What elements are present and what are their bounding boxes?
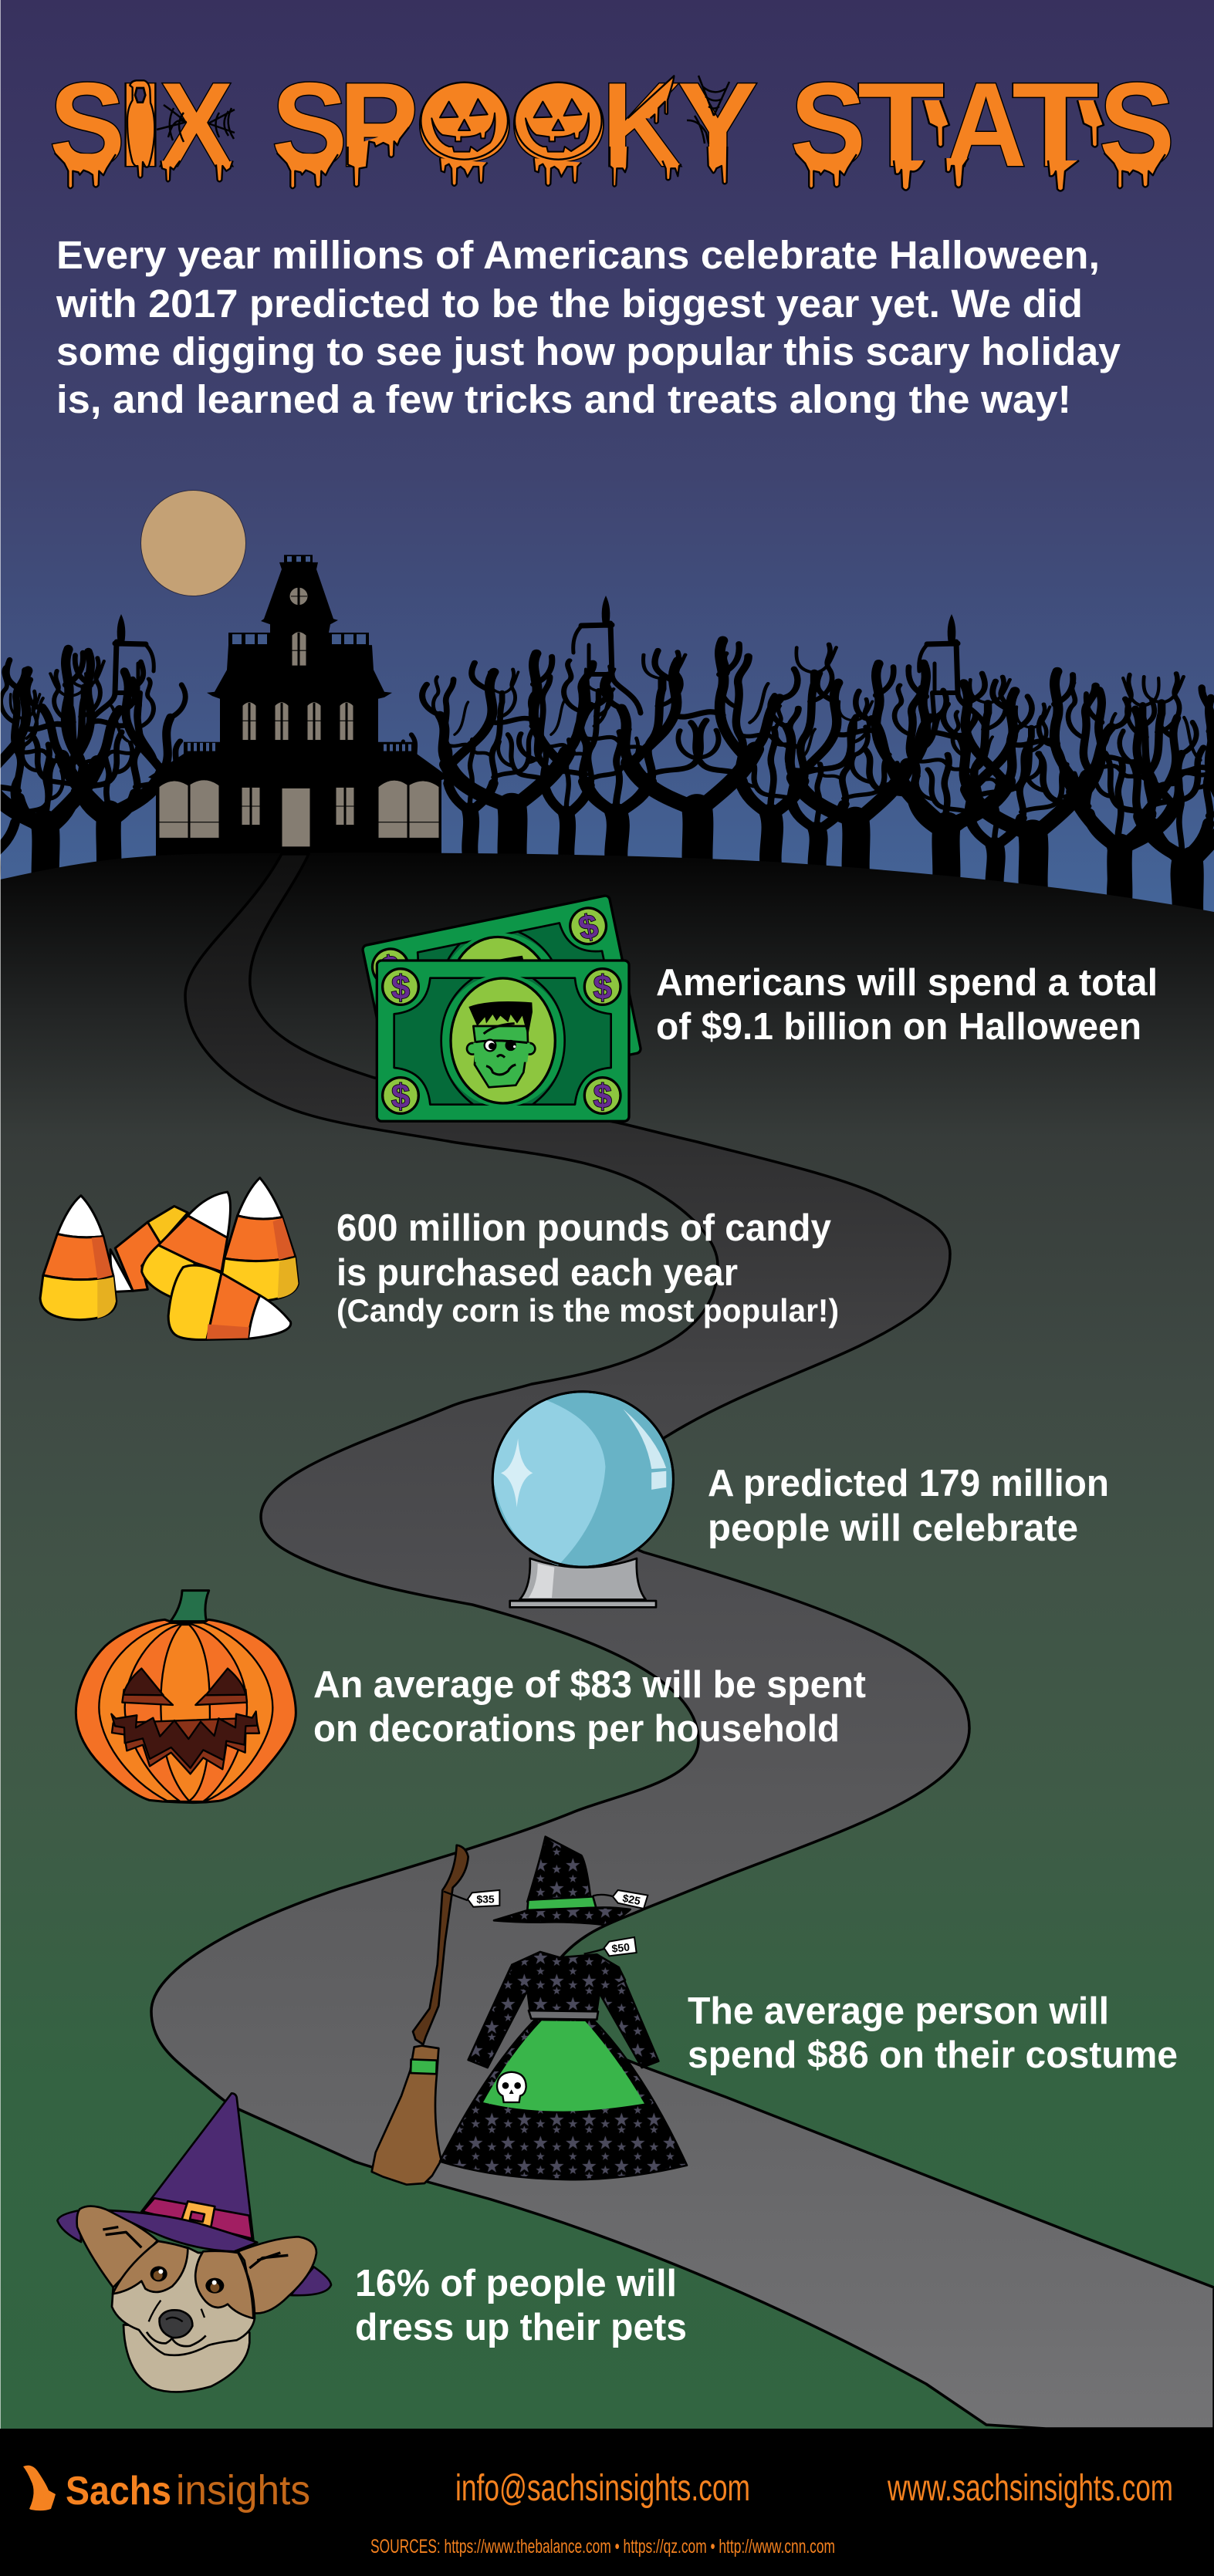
title drips and decorations <box>55 76 1165 191</box>
haunted house <box>148 555 449 864</box>
price tag: broom <box>444 1890 499 1907</box>
title letters: I <box>113 58 167 191</box>
front bill: $ <box>593 1079 612 1116</box>
icon: witch costume <box>372 1837 687 2185</box>
right candy <box>221 1178 298 1302</box>
title letters: K <box>602 58 681 191</box>
logo <box>23 2466 310 2514</box>
contact email: info@sachsinsights.com <box>455 2468 750 2509</box>
price tag: dress <box>584 1937 637 1956</box>
mouth <box>111 1711 259 1774</box>
title letters: T <box>1012 58 1099 191</box>
title letters: X <box>160 58 233 191</box>
logo: insights <box>176 2467 310 2514</box>
back bill <box>362 895 641 1103</box>
stat: candy: (Candy corn is the most popular!) <box>336 1292 839 1329</box>
price tag: dress: $50 <box>611 1940 631 1955</box>
front bill: $ <box>391 1079 410 1116</box>
lit windows <box>159 587 439 846</box>
front bill <box>377 961 629 1121</box>
stat: people celebrating: A predicted 179 million <box>708 1463 1109 1504</box>
title letters: O <box>415 66 514 183</box>
front bill: $ <box>593 970 612 1007</box>
icon: candy corn <box>40 1178 298 1340</box>
hat brim back <box>57 2210 331 2295</box>
title letters: S <box>790 58 866 191</box>
title letters: S <box>272 58 347 191</box>
footer band <box>0 2429 1214 2576</box>
sky background <box>0 0 1214 918</box>
stat: total spend <box>656 962 1158 1048</box>
stat: candy <box>336 1207 839 1329</box>
price tag: broom: $35 <box>476 1893 495 1906</box>
ear fur <box>103 2227 288 2268</box>
sources: SOURCES: https://www.thebalance.com • https://qz.com • http://www.cnn.com <box>370 2536 835 2557</box>
ball stand <box>510 1558 656 1607</box>
logo: Sachs <box>66 2469 171 2514</box>
balcony railings <box>188 556 411 751</box>
back tilted candy <box>110 1206 188 1291</box>
stat: pets: dress up their pets <box>355 2307 687 2348</box>
stat: candy: 600 million pounds of candy <box>336 1207 831 1249</box>
title letters: O <box>509 66 608 183</box>
intro paragraph: some digging to see just how popular this scary holiday <box>56 329 1121 373</box>
broom <box>372 1845 468 2185</box>
witch hat on dog <box>108 2093 257 2251</box>
stat: people celebrating: people will celebrate <box>708 1507 1078 1549</box>
tilted middle candy <box>142 1192 230 1302</box>
title letters: T <box>857 58 945 191</box>
witch hat <box>494 1837 631 1925</box>
intro paragraph: Every year millions of Americans celebrate Halloween, <box>56 233 1100 277</box>
stat: pets <box>355 2263 687 2348</box>
dead trees <box>0 596 1214 928</box>
nose and mouth <box>147 2301 206 2346</box>
winding road <box>151 854 1214 2429</box>
title letters <box>49 58 1175 191</box>
front bill: $ <box>391 970 410 1007</box>
stat: decorations <box>313 1664 866 1750</box>
back bill: $ <box>576 907 601 947</box>
icon: corgi in witch hat <box>57 2093 331 2392</box>
title letters: A <box>945 58 1026 191</box>
icon: jack-o-lantern <box>76 1591 296 1803</box>
icon: crystal ball <box>492 1392 673 1607</box>
front candy <box>168 1265 291 1340</box>
title letters: P <box>339 58 418 191</box>
witch dress <box>440 1952 687 2179</box>
stat: costume <box>688 1990 1178 2076</box>
title letters: S <box>49 58 125 191</box>
title <box>49 58 1175 191</box>
stat: people celebrating <box>708 1463 1109 1549</box>
stat: total spend: Americans will spend a total <box>656 962 1158 1004</box>
stat: costume: spend $86 on their costume <box>688 2034 1178 2076</box>
moon <box>140 491 245 596</box>
icon: money bills with Frankenstein <box>362 895 641 1121</box>
intro paragraph <box>56 233 1121 421</box>
stat: candy: is purchased each year <box>336 1252 738 1294</box>
stat: pets: 16% of people will <box>355 2263 677 2304</box>
stat: decorations: on decorations per household <box>313 1708 840 1750</box>
stat: costume: The average person will <box>688 1990 1109 2032</box>
stat: total spend: of $9.1 billion on Halloween <box>656 1006 1141 1048</box>
eyes <box>150 2266 224 2294</box>
intro paragraph: is, and learned a few tricks and treats along the way! <box>56 377 1071 421</box>
title letters: Y <box>678 58 758 191</box>
price tag: hat <box>593 1890 648 1909</box>
back bill: $ <box>378 948 404 988</box>
glass sphere <box>492 1392 673 1567</box>
price tag: hat: $25 <box>621 1892 641 1907</box>
skull patch <box>497 2072 526 2102</box>
left candy <box>40 1196 117 1320</box>
hill and ground <box>0 852 1214 2429</box>
title letters: S <box>1099 58 1175 191</box>
dog head <box>77 2206 316 2392</box>
stat: decorations: An average of $83 will be spent <box>313 1664 866 1706</box>
eyes <box>122 1669 247 1705</box>
intro paragraph: with 2017 predicted to be the biggest year yet. We did <box>56 282 1083 326</box>
